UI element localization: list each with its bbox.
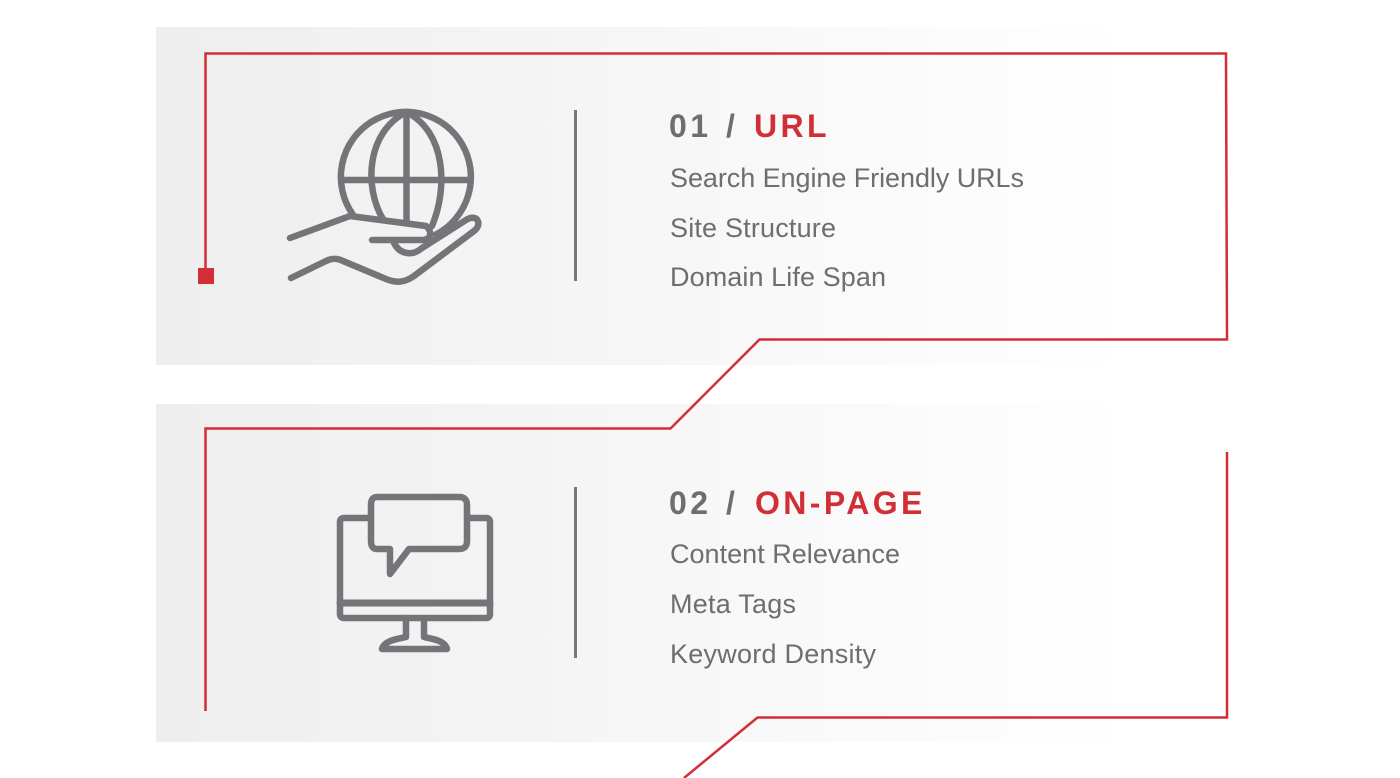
connector line: On-page frame [684, 452, 1227, 778]
heading: 02 / ON-PAGE: ON-PAGE [755, 485, 926, 521]
heading: 02 / ON-PAGE: 02 [669, 485, 711, 521]
heading: 01 / URL: / [726, 108, 738, 144]
divider: URL [574, 110, 577, 281]
panel: URL background [156, 27, 1236, 365]
heading: 02 / ON-PAGE: / [726, 485, 738, 521]
icon: globe in hand [290, 112, 478, 282]
heading: 01 / URL: URL [754, 108, 830, 144]
text: Meta Tags: Meta Tags [670, 589, 796, 619]
panel: On-page background [156, 404, 1236, 742]
heading: 01 / URL: 01 [669, 108, 711, 144]
text: Keyword Density: Keyword Density [670, 639, 876, 669]
divider: On-page [574, 487, 577, 658]
text: Content Relevance: Content Relevance [670, 539, 900, 569]
connector line: URL frame [206, 54, 1227, 711]
icon: monitor with speech bubble [340, 497, 490, 649]
text: Domain Life Span: Domain Life Span [670, 262, 886, 292]
start marker [198, 268, 214, 284]
text: Site Structure: Site Structure [670, 213, 836, 243]
text: Search Engine Friendly URLs: Search Engine Friendly URLs [670, 163, 1024, 193]
